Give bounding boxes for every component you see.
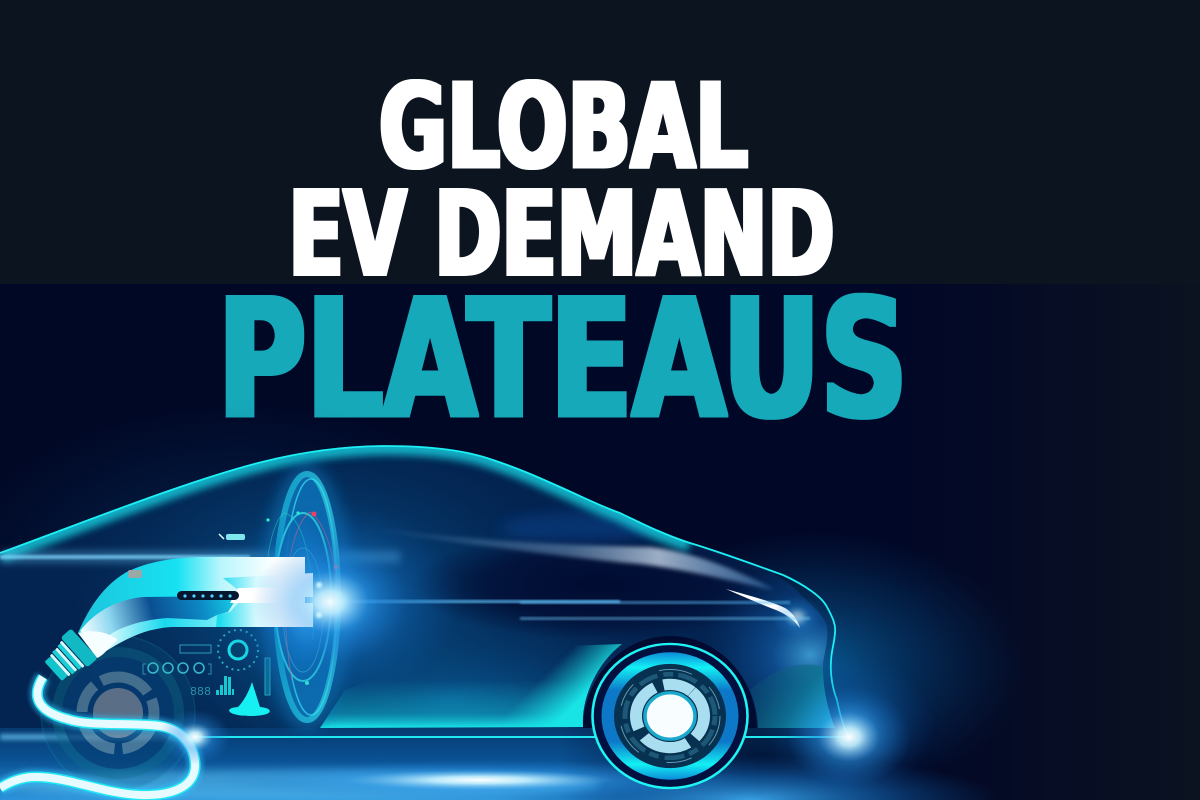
cable glow <box>0 677 195 795</box>
ambient glow <box>0 441 1001 800</box>
icon: panel box <box>180 645 211 653</box>
teal sill: middle <box>320 644 622 728</box>
hood highlight <box>413 534 772 590</box>
wide light flare behind plug <box>210 502 460 702</box>
strain relief <box>40 628 98 686</box>
dashboard icons <box>143 534 270 716</box>
cable <box>0 677 195 795</box>
light flare: tail <box>787 687 911 787</box>
icon: battery <box>219 534 245 540</box>
cable core <box>0 677 195 795</box>
cabin blue wash <box>500 512 660 544</box>
wheel arch <box>583 636 757 728</box>
front wheel <box>592 644 748 788</box>
icon: dials row <box>143 663 211 674</box>
light streaks <box>0 551 810 740</box>
connector base highlight <box>78 631 118 658</box>
charging port ring <box>261 463 353 731</box>
car outline <box>0 446 848 736</box>
connector nub <box>128 570 142 578</box>
light flare: ground left <box>159 709 231 765</box>
icon: cone <box>229 682 270 716</box>
title line: PLATEAUS: PLATEAUS <box>218 264 908 455</box>
body interior glow <box>270 631 614 728</box>
prongs <box>223 573 313 597</box>
connector dark band <box>80 596 238 643</box>
connector lower sliver <box>92 612 225 657</box>
light flare: tail glow <box>765 655 935 795</box>
roof inner glow <box>0 446 690 553</box>
light flare: plug tip <box>252 540 408 664</box>
charging plug <box>0 557 313 795</box>
car body silhouette <box>0 446 828 728</box>
icon: digits: 888 <box>190 685 211 698</box>
title line: GLOBAL: GLOBAL <box>379 58 748 195</box>
connector head <box>78 557 305 640</box>
LED slot <box>177 591 239 600</box>
title <box>218 58 908 455</box>
title line: EV DEMAND: EV DEMAND <box>288 166 834 303</box>
icon: level bar <box>265 658 270 695</box>
teal sill: front <box>750 665 835 728</box>
ground wash <box>0 728 800 800</box>
rear wheel arch <box>41 636 195 790</box>
ground line <box>195 736 850 738</box>
icon: gauge <box>218 630 258 670</box>
icon: bars <box>216 676 234 695</box>
infographic canvas <box>0 79 1015 800</box>
illustration: electric car and charging plug <box>0 441 1001 800</box>
headlight <box>726 589 800 628</box>
